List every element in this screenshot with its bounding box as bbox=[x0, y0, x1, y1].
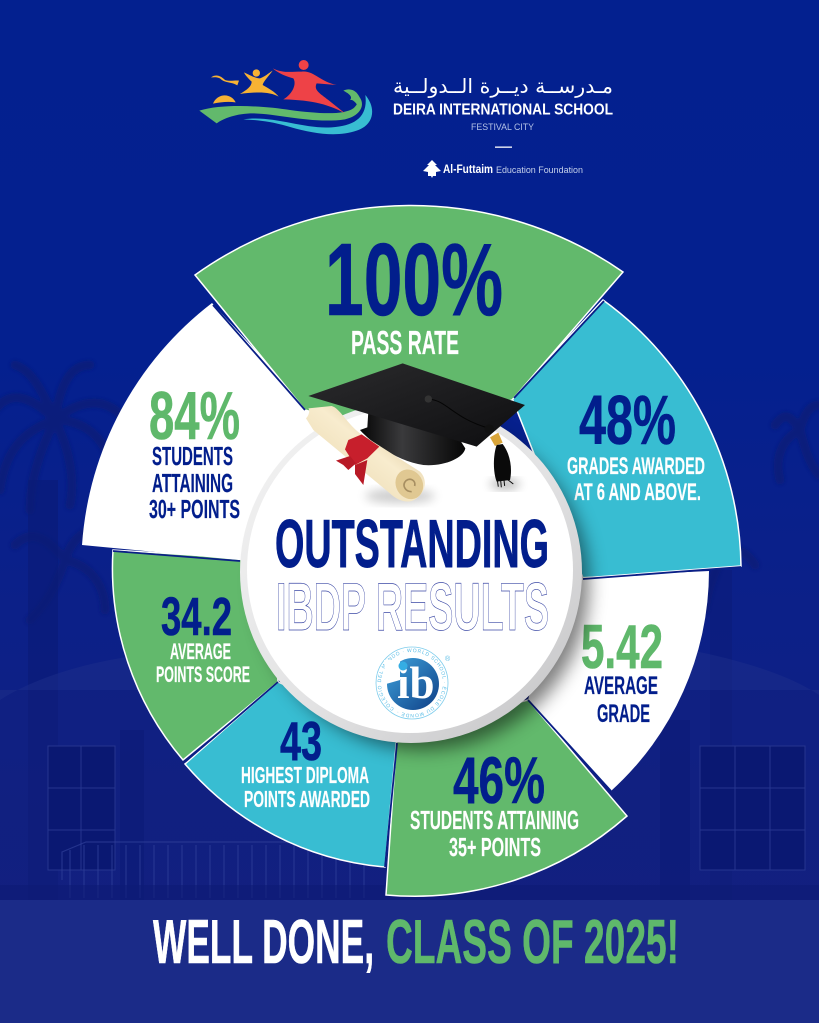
IB world school logo: ® bbox=[445, 655, 451, 663]
panel: 43 highest diploma points bbox=[185, 682, 397, 867]
panel: 46% students bbox=[386, 700, 627, 896]
label grade: GRADE bbox=[597, 700, 650, 728]
label students attaining: STUDENTS ATTAINING bbox=[410, 807, 579, 835]
school logo and name bbox=[199, 60, 613, 178]
label pass rate: PASS RATE bbox=[351, 324, 459, 361]
icon: red ribbon bbox=[345, 434, 379, 465]
label average: AVERAGE bbox=[584, 672, 658, 700]
stat 34.2: 34.2 bbox=[161, 587, 232, 647]
graduation cap and scroll bbox=[306, 363, 525, 504]
icon: scroll bbox=[306, 406, 425, 501]
icon: cap body bbox=[360, 412, 465, 465]
icon: tassel bbox=[490, 433, 503, 446]
label 35+ points: 35+ POINTS bbox=[449, 834, 541, 862]
stat 46%: 46% bbox=[453, 743, 545, 817]
IB world school logo: ib bbox=[397, 658, 435, 708]
panel: 48% grades bbox=[512, 300, 741, 578]
centre circle bbox=[240, 410, 602, 762]
label highest diploma: HIGHEST DIPLOMA bbox=[241, 762, 369, 788]
label students: STUDENTS bbox=[152, 441, 233, 471]
label grades awarded: GRADES AWARDED bbox=[567, 453, 705, 480]
label at 6 and above: AT 6 AND ABOVE. bbox=[574, 479, 701, 506]
label attaining: ATTAINING bbox=[152, 468, 233, 498]
well done: WELL DONE, bbox=[153, 908, 374, 977]
closing message bbox=[153, 908, 679, 977]
label 30+ points: 30+ POINTS bbox=[149, 494, 240, 524]
label points score: POINTS SCORE bbox=[156, 662, 250, 687]
Arabic school name: مـدرســة ديــرة الــدولــية bbox=[393, 74, 613, 98]
Education Foundation: Education Foundation bbox=[496, 165, 583, 176]
icon: mortarboard bbox=[308, 363, 525, 447]
stat 100%: 100% bbox=[325, 222, 503, 337]
icon: Al-Futtaim mark bbox=[423, 160, 441, 178]
panel: 100% pass rate bbox=[195, 206, 623, 440]
stat 48%: 48% bbox=[579, 381, 676, 459]
heading: outstanding: OUTSTANDING bbox=[275, 506, 549, 582]
stat 84%: 84% bbox=[149, 378, 240, 454]
panel: 5.42 average grade bbox=[528, 571, 709, 791]
logo emblem bbox=[199, 60, 372, 134]
campus name: FESTIVAL CITY bbox=[471, 122, 535, 133]
Al-Futtaim wordmark: Al-Futtaim bbox=[443, 164, 493, 176]
label points awarded: POINTS AWARDED bbox=[244, 786, 370, 812]
panel: 34.2 average points score bbox=[112, 550, 278, 760]
stat 5.42: 5.42 bbox=[581, 613, 663, 682]
background photo: school building and palms bbox=[0, 365, 819, 900]
IB world school logo: COLEGIO DEL MUNDO · WORLD SCHOOL · ÉCOLE DU MONDE · bbox=[378, 648, 447, 718]
stat 43: 43 bbox=[280, 710, 322, 772]
English school name: DEIRA INTERNATIONAL SCHOOL bbox=[393, 102, 613, 118]
footer band bbox=[0, 900, 819, 1023]
heading: IBDP results: IBDP RESULTS bbox=[276, 569, 549, 645]
label average: AVERAGE bbox=[170, 639, 231, 664]
panel: 84% students bbox=[82, 303, 320, 563]
